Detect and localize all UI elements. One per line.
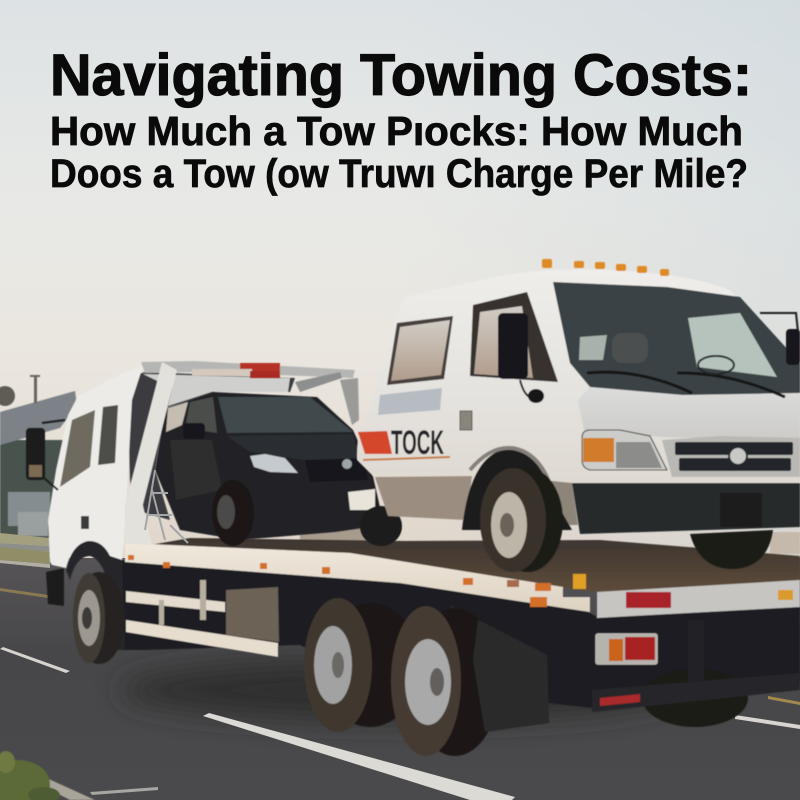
cab body (48, 366, 143, 568)
front grille (662, 436, 800, 477)
front fender trim (543, 480, 578, 525)
cab door handle (81, 516, 89, 529)
car far wheel (361, 511, 401, 545)
licence plate recess (720, 493, 762, 527)
cab rear window (98, 405, 118, 465)
seat (612, 333, 648, 363)
car side window (185, 397, 217, 433)
title line 3: Doos a Tow (ow Truwı Charge Per Mile? (50, 152, 748, 196)
steering wheel (698, 356, 734, 374)
car headlight (250, 454, 298, 473)
title heading (50, 43, 752, 196)
title line 2: How Much a Tow Pıocks: How Much (50, 108, 743, 154)
windshield small pane (579, 335, 607, 360)
rear wheel two (391, 606, 500, 756)
rear amber reflector (778, 590, 793, 600)
van front right wheel (690, 530, 773, 569)
car grille (305, 458, 368, 482)
van front bumper (572, 483, 800, 534)
tail light (595, 633, 658, 665)
van wheel arch (462, 448, 572, 530)
car door panel highlight (170, 440, 222, 500)
rear under-run bar (592, 620, 800, 727)
front wheel (73, 572, 125, 664)
door mirror (498, 313, 528, 379)
white bracket (348, 489, 375, 510)
right mirror (760, 313, 800, 365)
van body (357, 269, 800, 510)
lower mirror (520, 380, 532, 398)
grey stripe (378, 388, 442, 415)
background: sky (0, 0, 800, 580)
side rails (126, 580, 278, 657)
rear wheel one (304, 598, 372, 732)
rear mud flap (450, 605, 549, 732)
car side mirror (183, 423, 205, 439)
headboard rack (141, 361, 359, 425)
black towed car (155, 392, 401, 546)
mud flap front layer (473, 620, 549, 732)
rear cross beam (597, 580, 800, 618)
deck marker lights (127, 525, 586, 607)
road (0, 533, 800, 800)
front bumper (46, 568, 64, 606)
van front wheel (480, 468, 563, 572)
front wheel arch (66, 541, 125, 650)
red stripe (358, 431, 392, 454)
van lower sill (375, 476, 472, 520)
cab front window (60, 410, 95, 487)
tow truck (26, 366, 800, 756)
amber roof lights (542, 259, 669, 276)
background: roadside buildings and trees (0, 375, 800, 554)
deck surface (150, 538, 800, 592)
TOCK logo: TOCK (391, 424, 444, 462)
rear red reflector (626, 592, 671, 608)
side mirror (26, 420, 65, 490)
car hood (227, 434, 362, 470)
car windshield (218, 397, 353, 433)
tilted boom post (125, 362, 177, 545)
cab rear frame (127, 372, 295, 520)
toolbox (226, 587, 279, 642)
rear side window (387, 316, 453, 385)
ladder (145, 470, 188, 543)
icon: shrub in foreground (0, 751, 95, 800)
wipers (587, 372, 785, 397)
windshield bright pane (688, 313, 777, 377)
van hood (578, 387, 800, 440)
door window (470, 292, 558, 382)
title line 1: Navigating Towing Costs: (50, 43, 752, 108)
windshield (553, 282, 800, 395)
tow truck chassis (108, 560, 800, 730)
road shadow under truck (120, 660, 680, 720)
white transported truck (357, 259, 800, 572)
headlight assembly (582, 430, 667, 470)
van rear wheel (360, 506, 402, 546)
car front wheel (212, 480, 254, 546)
door handle (460, 411, 472, 430)
rear tyres shadow (320, 603, 420, 727)
orange pinstripe (363, 456, 450, 461)
white flatbed rail (125, 543, 590, 612)
